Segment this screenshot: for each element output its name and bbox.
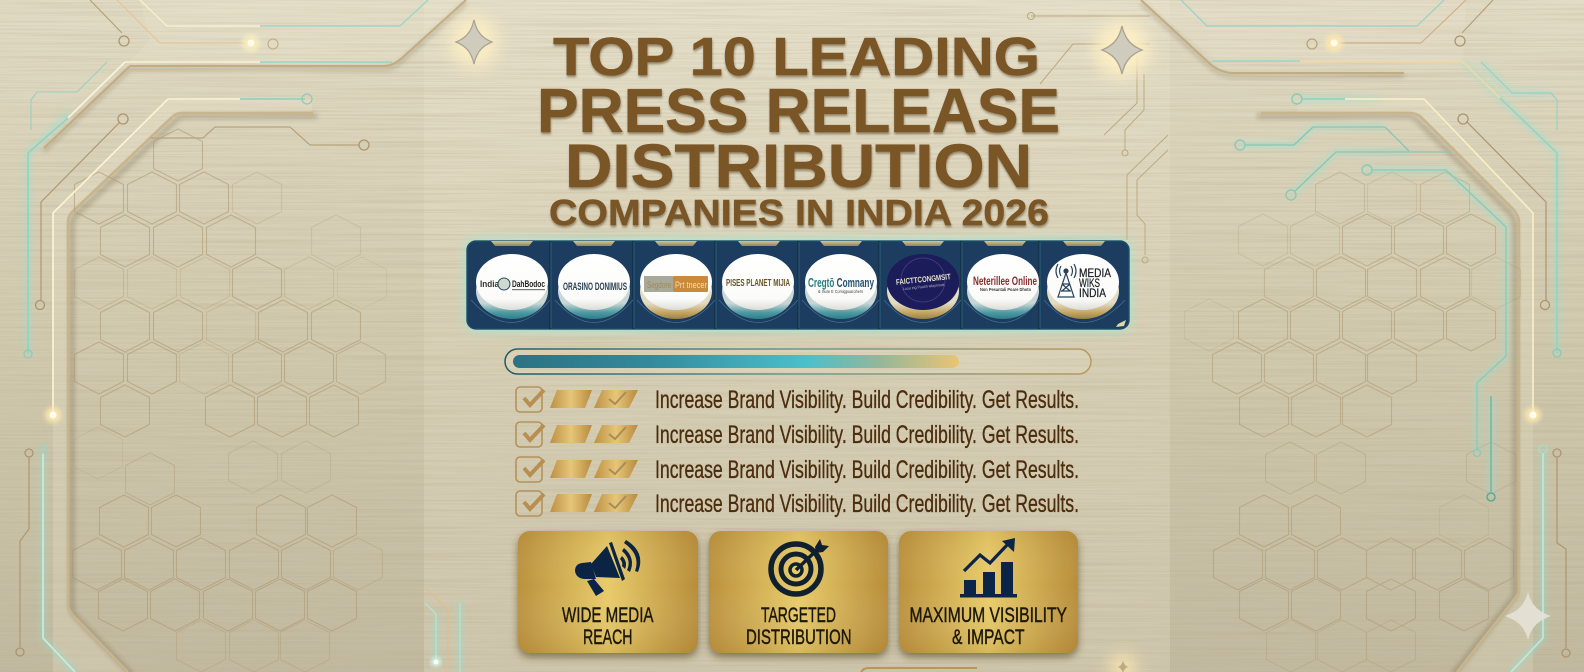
logo 1: India bbox=[480, 279, 500, 289]
left frame band bbox=[44, 0, 466, 672]
logo 5 bbox=[805, 254, 877, 319]
corner curl bbox=[1116, 320, 1126, 327]
logo 2: ORASINO DONIMIUS bbox=[563, 281, 627, 293]
logo 1 bbox=[476, 254, 548, 319]
logo 5: & Ifiure E Comigpuarohers bbox=[818, 289, 864, 294]
logo 6: Loou ing Poush wlaynious bbox=[902, 282, 945, 291]
title: COMPANIES IN INDIA 2026 bbox=[549, 192, 1049, 233]
card: wide media reach bbox=[518, 531, 698, 653]
icon: megaphone bbox=[575, 540, 640, 596]
logo 7: Neterillee Online bbox=[973, 274, 1037, 288]
star: bottom centre bbox=[1109, 655, 1137, 672]
star: top right bbox=[1094, 22, 1150, 78]
logo 7: Non Pesantali Poare Dhoto bbox=[980, 287, 1031, 292]
card label: DISTRIBUTION bbox=[746, 625, 852, 649]
logo 8: INDIA bbox=[1079, 288, 1106, 300]
card label bbox=[746, 603, 852, 649]
card: maximum visibility and impact bbox=[899, 531, 1078, 653]
logo 4 bbox=[722, 254, 794, 319]
card label bbox=[562, 603, 654, 649]
card label: WIDE MEDIA bbox=[562, 603, 654, 627]
checklist row 1 bbox=[516, 386, 1079, 414]
card label: MAXIMUM VISIBILITY bbox=[910, 603, 1067, 627]
circuit traces: left bbox=[16, 0, 460, 672]
right frame band bbox=[1141, 0, 1533, 672]
hexagon pattern right bbox=[1184, 172, 1520, 672]
title: PRESS RELEASE bbox=[537, 77, 1060, 146]
card label: TARGETED bbox=[761, 603, 836, 627]
bottom badge outline bbox=[861, 668, 977, 672]
checklist row 4: Increase Brand Visibility. Build Credibility. Get Results. bbox=[655, 490, 1079, 518]
circuit traces: right bbox=[1028, 0, 1570, 672]
card label: REACH bbox=[583, 625, 632, 649]
title: DISTRIBUTION bbox=[565, 132, 1032, 200]
card: targeted distribution bbox=[709, 531, 888, 653]
logo 3: Segdore bbox=[647, 280, 671, 290]
checklist row 3: Increase Brand Visibility. Build Credibility. Get Results. bbox=[655, 456, 1079, 484]
checklist row 4 bbox=[516, 490, 1079, 518]
panel background bbox=[467, 241, 1129, 329]
cell dividers, arcs and gold tabs bbox=[471, 241, 1125, 329]
logo 8: WIKS bbox=[1079, 278, 1100, 290]
tower icon bbox=[1056, 264, 1076, 297]
icon: rising bar chart bbox=[960, 538, 1017, 598]
card label: & IMPACT bbox=[952, 625, 1024, 649]
logo 8 bbox=[1047, 254, 1119, 319]
logo 3: Prt tnecer bbox=[675, 280, 707, 290]
progress bar bbox=[505, 349, 1091, 374]
logo 7 bbox=[967, 254, 1039, 319]
icon: target with arrow bbox=[771, 539, 829, 594]
company logo panel bbox=[467, 241, 1129, 329]
checklist row 1: Increase Brand Visibility. Build Credibility. Get Results. bbox=[655, 386, 1079, 414]
star: top left bbox=[450, 16, 498, 68]
logo 5: Cregtō Comnany bbox=[808, 275, 874, 290]
title: TOP 10 LEADING bbox=[553, 27, 1040, 87]
logo 1: DahBodoc bbox=[512, 279, 545, 289]
checklist row 3 bbox=[516, 456, 1079, 484]
card label bbox=[910, 603, 1067, 649]
checklist bbox=[516, 386, 1079, 518]
title bbox=[537, 27, 1060, 233]
logo 6 bbox=[887, 254, 959, 319]
checklist row 2: Increase Brand Visibility. Build Credibility. Get Results. bbox=[655, 421, 1079, 449]
star: bottom right bbox=[1505, 592, 1551, 640]
logo 4: PISES PLANET MIJIA bbox=[726, 278, 790, 289]
logo 8: MEDIA bbox=[1079, 268, 1111, 280]
hexagon pattern left bbox=[72, 129, 386, 672]
logo 3 bbox=[640, 254, 712, 319]
checklist row 2 bbox=[516, 421, 1079, 449]
logo 6: FAICTTCONGMSIT bbox=[896, 272, 951, 287]
logo 2 bbox=[558, 254, 630, 319]
